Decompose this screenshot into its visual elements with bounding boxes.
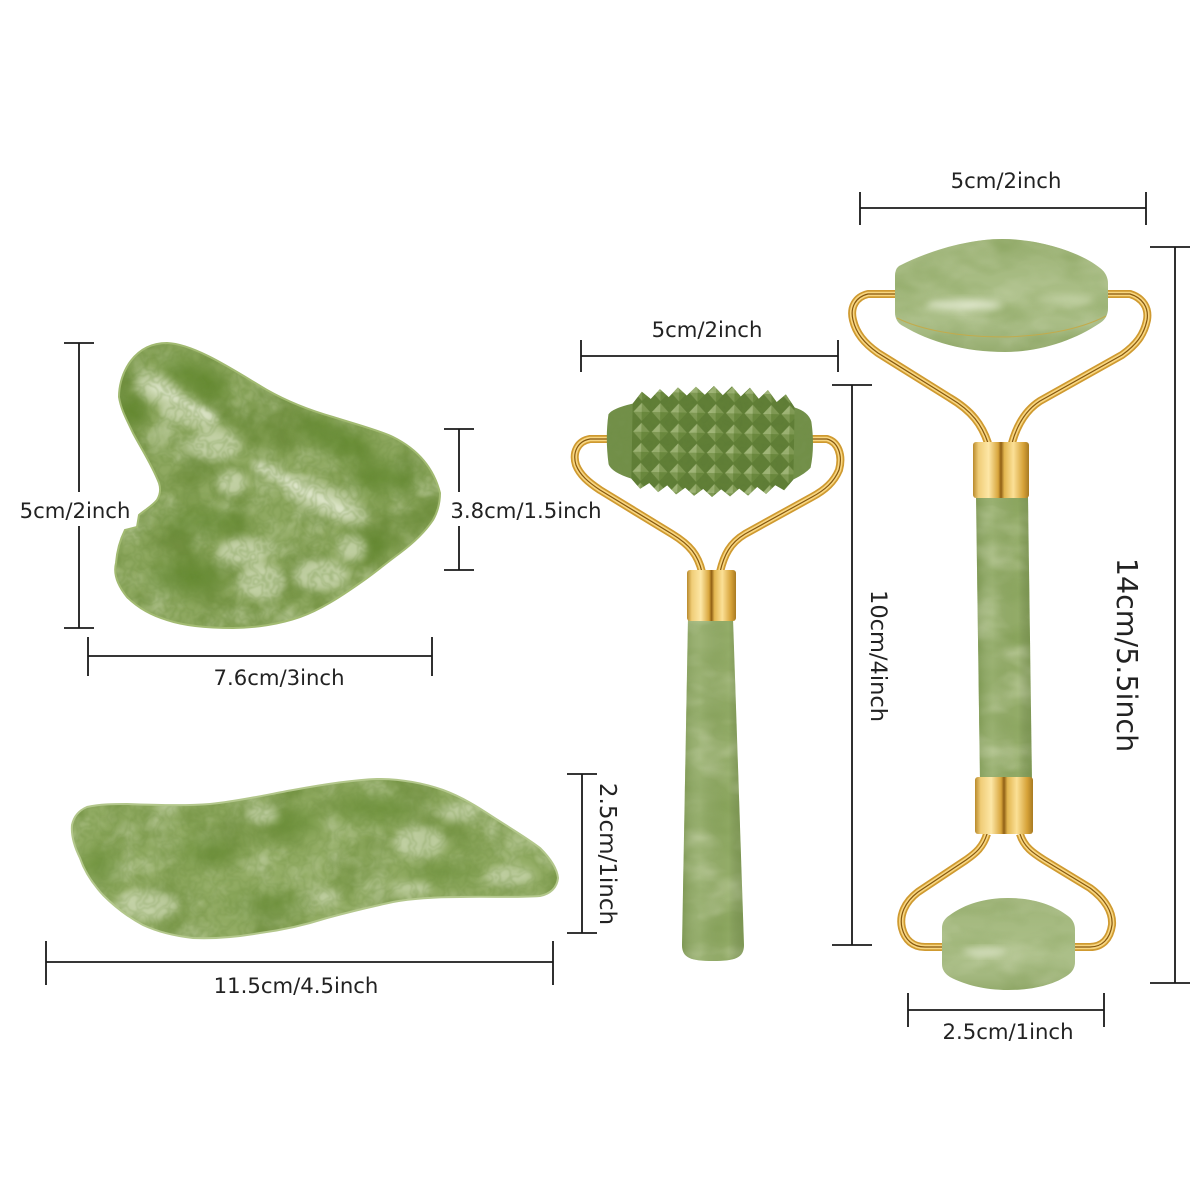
dimension: small roller width bbox=[908, 993, 1104, 1044]
dimension: spiked roller width: 5cm/2inch bbox=[652, 317, 762, 342]
dimension: large roller width: 5cm/2inch bbox=[951, 168, 1061, 193]
gua sha heart-shaped stone bbox=[110, 340, 445, 635]
dimension: wave height bbox=[567, 774, 620, 933]
dimension: double roller length: 14cm/5.5inch bbox=[1110, 558, 1143, 752]
dimension: small roller width: 2.5cm/1inch bbox=[942, 1019, 1074, 1044]
gold frames bbox=[852, 294, 1147, 947]
dimension: wave width bbox=[46, 941, 553, 998]
jade handle bbox=[976, 498, 1032, 778]
dimension: spiked roller height: 10cm/4inch bbox=[865, 590, 891, 722]
dimension: heart height bbox=[20, 343, 130, 628]
gua sha wave-shaped stone bbox=[70, 775, 560, 943]
dimension: wave width: 11.5cm/4.5inch bbox=[214, 973, 378, 998]
dimension: wave height: 2.5cm/1inch bbox=[594, 783, 620, 925]
dimension: spiked roller width bbox=[581, 317, 838, 372]
large jade barrel bbox=[895, 239, 1108, 352]
dimension: spiked roller height bbox=[832, 385, 891, 945]
dimension: heart width: 7.6cm/3inch bbox=[214, 665, 344, 690]
dimension: heart inner height bbox=[444, 429, 602, 570]
small jade barrel bbox=[942, 898, 1075, 990]
gold collar bbox=[687, 570, 736, 621]
gold frame of spiked roller bbox=[575, 439, 840, 572]
dimension: heart inner height: 3.8cm/1.5inch bbox=[450, 498, 602, 523]
dimension: double roller length bbox=[1110, 247, 1190, 983]
top gold collar bbox=[973, 442, 1029, 498]
spiked jade barrel bbox=[606, 386, 813, 497]
large double roller bbox=[852, 236, 1147, 996]
jade handle bbox=[682, 620, 744, 961]
dimension: large roller width bbox=[860, 168, 1146, 225]
dimension: heart height: 5cm/2inch bbox=[20, 498, 130, 523]
spiked roller bbox=[575, 378, 840, 962]
bottom gold collar bbox=[975, 777, 1033, 834]
dimension: heart width bbox=[88, 637, 432, 690]
